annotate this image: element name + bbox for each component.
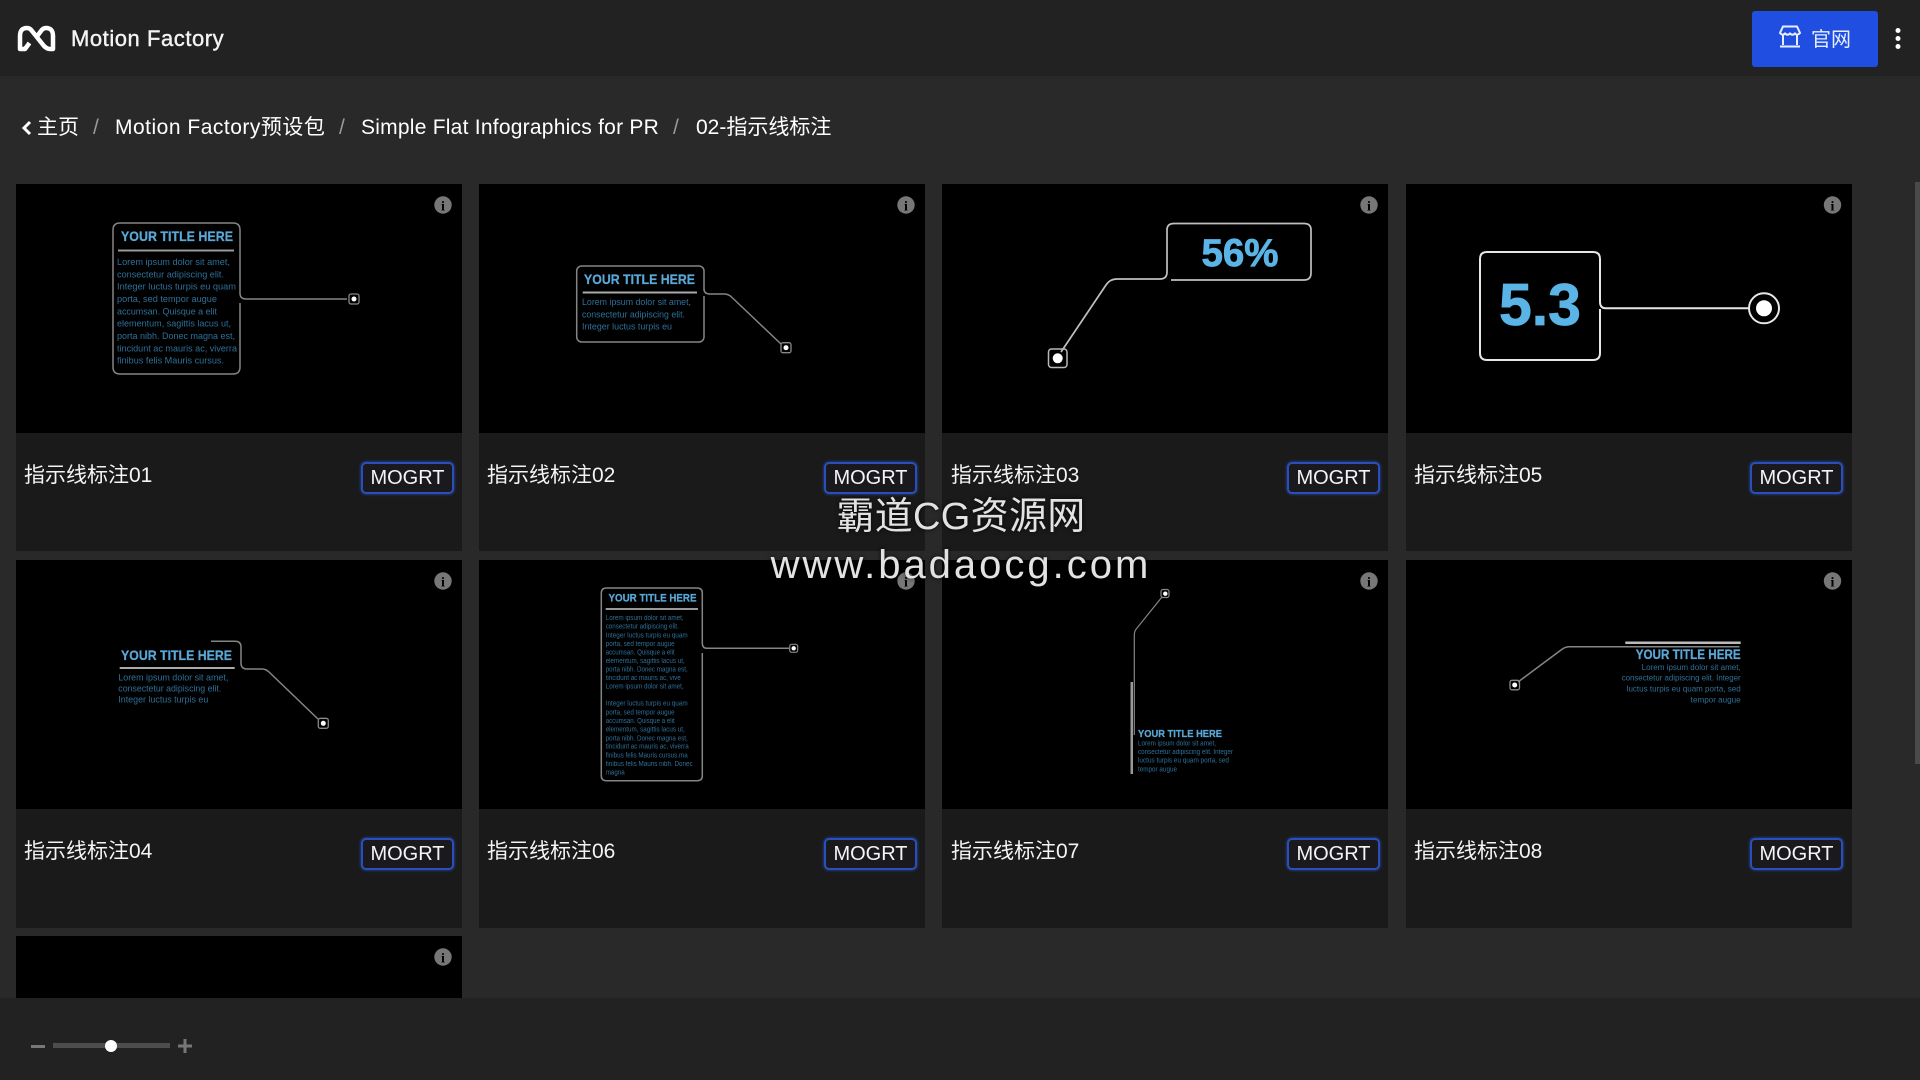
- button: MOGRT: [1750, 838, 1843, 870]
- breadcrumb: 02-指示线标注: [696, 116, 831, 138]
- thumbnail: 56% callout: i: [1367, 200, 1371, 214]
- thumbnail: vertical callout: YOUR TITLE HERE: [1138, 728, 1222, 740]
- thumbnail: open callout: [16, 560, 462, 809]
- footer bar with zoom slider: [0, 998, 1920, 1080]
- thumbnail: tall callout: porta, sed tempor augue: [606, 709, 675, 716]
- caption: 指示线标注03: [951, 464, 1079, 486]
- thumbnail: vertical callout: consectetur adipiscing elit. Integer: [1138, 749, 1234, 756]
- caption: 指示线标注02: [487, 464, 615, 486]
- thumbnail: callout with title box: finibus felis Mauris cursus.: [117, 356, 224, 366]
- thumbnail: tall callout: tincidunt ac mauris ac, vive: [606, 675, 681, 682]
- thumbnail: callout with short box: YOUR TITLE HERE: [584, 271, 695, 287]
- button: MOGRT: [1287, 462, 1380, 494]
- panel: card 指示线标注02: [479, 184, 925, 551]
- icon: more menu: [1896, 28, 1900, 49]
- thumbnail: 5.3 callout: 5.3: [1499, 272, 1581, 338]
- breadcrumb: Simple Flat Infographics for PR: [361, 116, 659, 138]
- thumbnail: callout with title box: elementum, sagittis lacus ut,: [117, 319, 231, 329]
- icon: minus: [31, 1045, 45, 1048]
- button: official site: [1752, 11, 1878, 67]
- thumbnail: callout with short box: Lorem ipsum dolor sit amet,: [582, 297, 691, 307]
- icon: Motion Factory logo: [18, 26, 56, 52]
- thumbnail: tall callout: porta nibh. Donec magna est,: [606, 735, 688, 742]
- watermark url: www.badaocg.com: [771, 542, 1151, 586]
- thumbnail: right-aligned callout: i: [1831, 576, 1835, 590]
- button label: 官网: [1811, 29, 1851, 51]
- watermark name: 霸道CG资源网: [836, 496, 1086, 538]
- thumbnail: open callout: consectetur adipiscing elit.: [118, 684, 221, 694]
- button: MOGRT: MOGRT: [833, 843, 908, 865]
- thumbnail: tall callout: finibus felis Mauris nibh. Donec: [606, 761, 693, 768]
- thumbnail: open callout: i: [441, 576, 445, 590]
- caption: 指示线标注08: [1414, 840, 1542, 862]
- thumbnail: callout with title box: porta, sed tempor augue: [117, 294, 217, 304]
- thumbnail: tall callout: magna: [606, 769, 625, 776]
- icon: store: [1779, 26, 1801, 48]
- thumbnail: vertical callout: tempor augue: [1138, 766, 1177, 773]
- thumbnail: tall callout: Lorem ipsum dolor sit amet,: [606, 615, 684, 622]
- thumbnail: right-aligned callout: consectetur adipiscing elit. Integer: [1622, 674, 1741, 683]
- thumbnail: 5.3 callout: [1406, 184, 1852, 433]
- thumbnail: right-aligned callout: YOUR TITLE HERE: [1636, 647, 1741, 662]
- panel: card 指示线标注04: [16, 560, 462, 928]
- thumbnail: tall callout: finibus felis Mauris cursus.ma: [606, 752, 688, 759]
- thumbnail: tall callout: [479, 560, 925, 809]
- scrollbar: [1915, 182, 1920, 764]
- thumbnail: callout with title box: Integer luctus turpis eu quam: [117, 282, 236, 292]
- caption: 指示线标注07: [951, 840, 1079, 862]
- caption: 指示线标注04: [24, 840, 152, 862]
- thumbnail: callout with short box: consectetur adipiscing elit.: [582, 309, 685, 319]
- thumbnail: callout with title box: consectetur adipiscing elit.: [117, 269, 224, 279]
- slider track: [53, 1043, 170, 1048]
- button: MOGRT: [1287, 838, 1380, 870]
- thumbnail: vertical callout: Lorem ipsum dolor sit amet,: [1138, 740, 1216, 747]
- thumbnail: tall callout: i: [904, 576, 908, 590]
- thumbnail: callout with title box: accumsan. Quisque a elit: [117, 306, 217, 316]
- thumbnail: right-aligned callout: Lorem ipsum dolor sit amet,: [1642, 663, 1741, 672]
- button: MOGRT: [361, 462, 454, 494]
- thumbnail: tall callout: YOUR TITLE HERE: [608, 592, 696, 604]
- panel: partial card row 3: [16, 936, 462, 998]
- thumbnail: open callout: Integer luctus turpis eu: [118, 694, 208, 704]
- thumbnail: tall callout: accumsan. Quisque a elit: [606, 649, 675, 656]
- breadcrumb: /: [93, 116, 99, 138]
- thumbnail: tall callout: elementum, sagittis lacus ut,: [606, 727, 685, 734]
- button: MOGRT: MOGRT: [370, 467, 445, 489]
- caption: 指示线标注06: [487, 840, 615, 862]
- thumbnail: tall callout: consectetur adipiscing elit.: [606, 624, 679, 631]
- thumbnail: callout with short box: i: [904, 200, 908, 214]
- button: MOGRT: MOGRT: [370, 843, 445, 865]
- breadcrumb: Motion Factory预设包: [115, 116, 325, 138]
- thumbnail: open callout: Lorem ipsum dolor sit amet,: [118, 673, 228, 683]
- thumbnail: callout with title box: Lorem ipsum dolor sit amet,: [117, 257, 230, 267]
- breadcrumb: 主页: [37, 116, 79, 138]
- thumbnail: callout with short box: Integer luctus turpis eu: [582, 321, 672, 331]
- button: MOGRT: MOGRT: [1759, 467, 1834, 489]
- panel: card 指示线标注06: [479, 560, 925, 928]
- thumbnail: tall callout: elementum, sagittis lacus ut,: [606, 658, 685, 665]
- thumbnail: right-aligned callout: tempor augue: [1691, 695, 1741, 704]
- thumbnail: open callout: YOUR TITLE HERE: [121, 647, 232, 663]
- thumbnail: callout with title box: tincidunt ac mauris ac, viverra: [117, 343, 237, 353]
- thumbnail: callout with title box: YOUR TITLE HERE: [121, 228, 233, 244]
- thumbnail: vertical callout: luctus turpis eu quam porta, sed: [1138, 758, 1229, 765]
- thumbnail: tall callout: Integer luctus turpis eu quam: [606, 701, 688, 708]
- caption: 指示线标注05: [1414, 464, 1542, 486]
- icon: plus: [178, 1039, 192, 1053]
- caption: 指示线标注01: [24, 464, 152, 486]
- panel: card 指示线标注01: [16, 184, 462, 551]
- button: MOGRT: MOGRT: [1296, 467, 1371, 489]
- button: MOGRT: MOGRT: [1296, 843, 1371, 865]
- breadcrumb: [22, 116, 831, 138]
- thumbnail: tall callout: Integer luctus turpis eu quam: [606, 632, 688, 639]
- thumbnail: 5.3 callout: i: [1831, 200, 1835, 214]
- panel: card 指示线标注03: [942, 184, 1388, 551]
- thumbnail: tall callout: porta, sed tempor augue: [606, 641, 675, 648]
- thumbnail: callout with short box: [479, 184, 925, 433]
- button: MOGRT: [824, 462, 917, 494]
- thumbnail: vertical callout: [942, 560, 1388, 809]
- button: MOGRT: [824, 838, 917, 870]
- thumbnail: tall callout: porta nibh. Donec magna est,: [606, 667, 688, 674]
- thumbnail: callout with title box: [16, 184, 462, 433]
- watermark: [770, 496, 1151, 586]
- thumbnail: tall callout: accumsan. Quisque a elit: [606, 718, 675, 725]
- breadcrumb: /: [673, 116, 679, 138]
- thumbnail: right-aligned callout: luctus turpis eu quam porta, sed: [1627, 684, 1741, 693]
- top bar: [0, 0, 1920, 76]
- thumbnail: right-aligned callout: [1406, 560, 1852, 809]
- panel: card 指示线标注05: [1406, 184, 1852, 551]
- panel: card 指示线标注07: [942, 560, 1388, 928]
- button: MOGRT: MOGRT: [833, 467, 908, 489]
- button: MOGRT: [1750, 462, 1843, 494]
- brand name: Motion Factory: [71, 26, 224, 51]
- button: MOGRT: [361, 838, 454, 870]
- thumbnail: callout with title box: porta nibh. Donec magna est,: [117, 331, 235, 341]
- thumbnail: tall callout: tincidunt ac mauris ac, viverra: [606, 744, 689, 751]
- thumbnail: tall callout: Lorem ipsum dolor sit amet,: [606, 684, 684, 691]
- thumbnail: callout with title box: i: [441, 200, 445, 214]
- slider knob: [105, 1040, 117, 1052]
- breadcrumb: /: [339, 116, 345, 138]
- panel: card 指示线标注08: [1406, 560, 1852, 928]
- button: MOGRT: MOGRT: [1759, 843, 1834, 865]
- thumbnail: 56% callout: [942, 184, 1388, 433]
- icon: info: [434, 948, 452, 966]
- thumbnail: vertical callout: i: [1367, 576, 1371, 590]
- thumbnail: 56% callout: 56%: [1202, 232, 1278, 275]
